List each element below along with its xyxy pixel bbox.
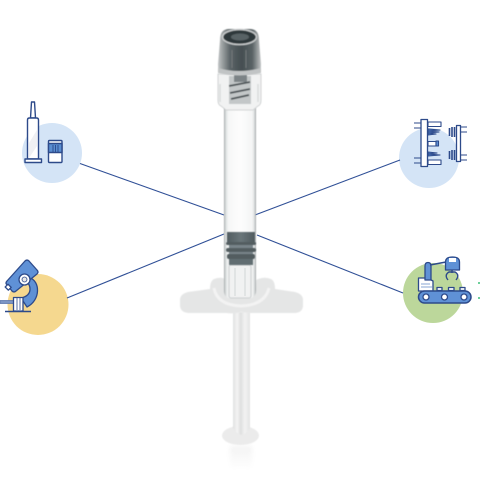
microscope block xyxy=(14,298,23,311)
plunger tip stripes xyxy=(235,268,245,296)
plunger rod xyxy=(233,312,250,435)
syringe highlight xyxy=(29,130,37,158)
vial label xyxy=(48,144,62,152)
robot arm link xyxy=(430,262,446,265)
eyepiece xyxy=(5,284,11,290)
background circle: bottom left xyxy=(8,274,68,335)
focus knob xyxy=(19,274,30,285)
icon: mold components xyxy=(414,120,467,166)
stopper xyxy=(226,232,256,265)
robot claw xyxy=(446,270,458,280)
needle cap xyxy=(218,29,261,76)
background circle: top right xyxy=(399,128,459,188)
clipped edge marks: right xyxy=(478,282,480,299)
syringe xyxy=(180,29,303,470)
connector lines xyxy=(67,160,403,298)
syringe body xyxy=(28,118,38,159)
robot head xyxy=(446,257,460,270)
robot arm post xyxy=(425,262,431,280)
lower plunger tip xyxy=(229,265,251,298)
icon: microscope xyxy=(0,260,38,312)
flange collar xyxy=(214,288,269,306)
vial xyxy=(48,140,62,162)
background circle: bottom right xyxy=(403,263,463,323)
microscope base xyxy=(5,310,31,312)
syringe needle xyxy=(30,102,36,118)
luer hub xyxy=(218,74,261,110)
syringe base xyxy=(25,159,42,162)
plunger disk xyxy=(222,426,259,445)
conveyor items xyxy=(437,288,442,290)
background circle: top left xyxy=(22,123,82,183)
microscope arm xyxy=(21,278,38,307)
conveyor belt xyxy=(418,291,471,303)
robot cabinet xyxy=(418,278,433,291)
icon: syringe and vial xyxy=(25,102,62,162)
microscope stage xyxy=(0,300,14,304)
glass barrel xyxy=(224,108,256,298)
plunger rod reflection xyxy=(230,446,252,470)
icon: robot arm and conveyor xyxy=(418,257,471,303)
finger flange xyxy=(180,278,303,313)
microscope tube xyxy=(6,260,38,292)
